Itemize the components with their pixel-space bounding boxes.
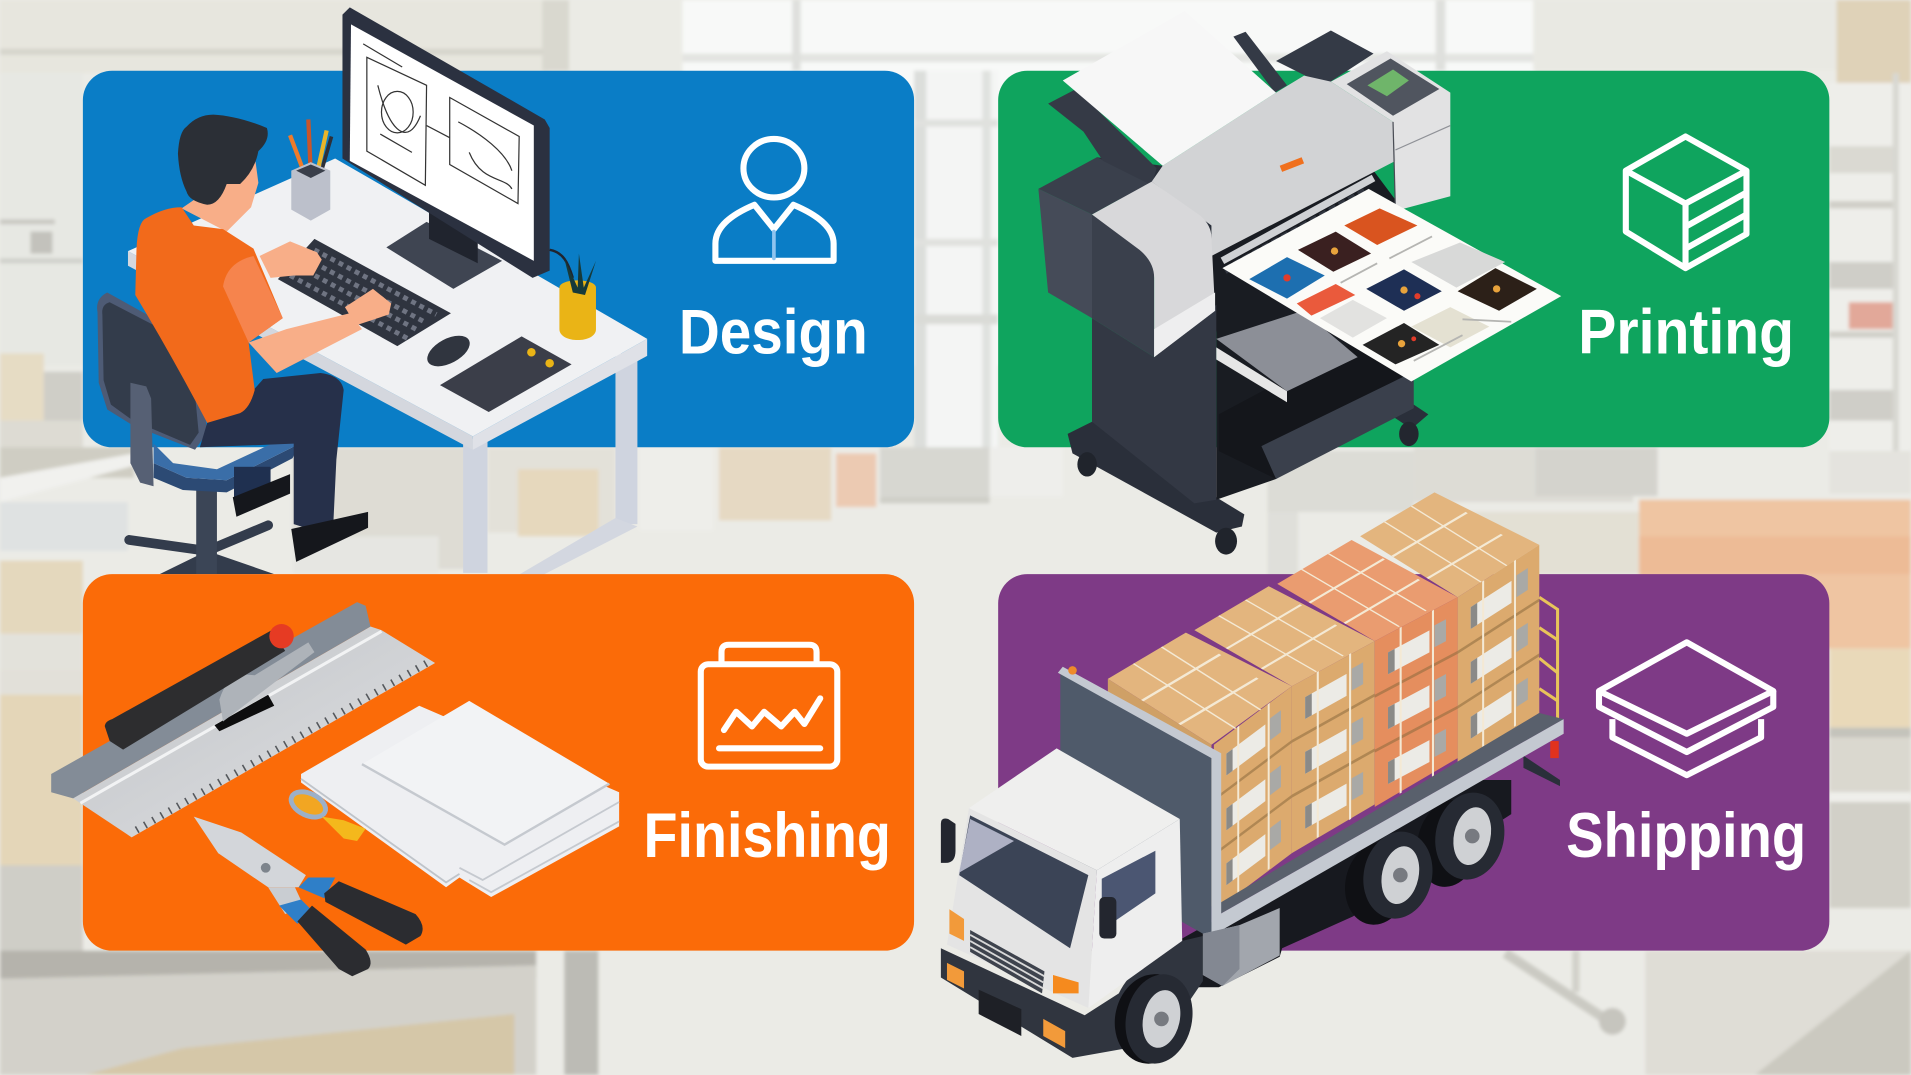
card: green background [998,71,1829,447]
cab [941,748,1203,1058]
paper stack [301,701,619,897]
heading: Design: Design [679,297,868,367]
panel: Printing [998,11,1829,555]
heading: Finishing: Finishing [644,801,891,871]
printer stand [1038,157,1428,555]
cargo boxes [1108,492,1539,912]
icon: person [715,139,834,261]
printer body [1092,51,1450,357]
drawing tablet [440,336,572,412]
output tray [1216,311,1358,402]
yellow binder clip [287,787,366,841]
scissors [194,817,423,976]
panel: Shipping [941,492,1829,1071]
mouse [422,329,475,373]
printer back feeder [1048,30,1374,185]
pencil cup [290,119,332,221]
cab header wall [1058,666,1221,938]
illustration: loaded truck [941,492,1564,1071]
input paper [1063,11,1276,166]
plant pot [550,250,596,340]
front wheel [1107,967,1201,1071]
heading: Shipping: Shipping [1566,801,1806,871]
rear ladder and stop light [1523,597,1560,786]
icon: folder with chart [701,645,837,767]
output rollers [1222,178,1374,271]
person [135,115,391,562]
chassis [1182,780,1511,987]
chair [97,293,303,574]
card: blue background [83,71,914,447]
truck bed [1211,713,1564,936]
illustration: large format printer [1038,11,1561,555]
illustration: designer at desk [97,7,647,575]
fuel tanks [1203,908,1280,986]
panel: Design [83,7,914,575]
monitor [342,7,550,289]
icon: cube [1626,137,1746,268]
rear wheels [1338,786,1512,931]
printed sheet [1222,189,1561,381]
desk [128,158,647,575]
paper cutter ruler [51,602,435,837]
panel: Finishing [51,574,914,976]
card: purple background [998,574,1829,951]
heading: Printing: Printing [1578,297,1794,367]
illustration: cutter, paper and scissors [51,602,619,976]
card: orange background [83,574,914,951]
keyboard [278,239,451,346]
icon: stacked layers [1599,642,1773,775]
